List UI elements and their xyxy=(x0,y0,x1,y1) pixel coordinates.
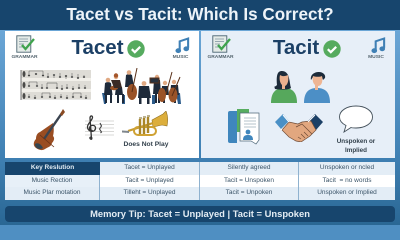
icon: speech bubble xyxy=(339,106,373,133)
row 2 xyxy=(5,175,395,187)
heading: tacit: Tacit xyxy=(273,36,319,59)
icon: music xyxy=(175,37,190,54)
row 1: Unspoken or ncled xyxy=(320,164,374,171)
icon: documents xyxy=(228,109,260,144)
icon: handshake xyxy=(275,114,323,142)
row header xyxy=(5,162,100,175)
title: Tacet vs Tacit: Which Is Correct? xyxy=(66,5,334,24)
label: music: MUSIC xyxy=(368,55,384,60)
icon: violin xyxy=(34,109,65,150)
row 1: Silently agreed xyxy=(228,164,270,171)
icon: check xyxy=(323,40,341,58)
row 2: Tacit = Unspoken xyxy=(224,177,274,184)
panel: tacet xyxy=(4,31,199,158)
comparison table xyxy=(5,162,395,200)
icon: two people xyxy=(271,71,330,103)
panel: tacit xyxy=(201,31,395,158)
label: unspoken or implied: Implied xyxy=(345,147,367,154)
label: unspoken or implied xyxy=(337,138,376,154)
label: does not play: Does Not Play xyxy=(124,141,168,148)
icon: music xyxy=(371,37,386,54)
row 3: Tacit = Unpoken xyxy=(226,189,272,196)
memory tip text: Memory Tip: Tacet = Unplayed | Tacit = Unspoken xyxy=(90,208,310,219)
row 2: Music Rection xyxy=(32,177,72,184)
title banner xyxy=(0,0,400,30)
row 2: Tacit = no words xyxy=(323,177,371,184)
icon: grammar xyxy=(212,35,231,53)
row 1 xyxy=(5,162,395,175)
row header: Key Reslution xyxy=(31,164,74,171)
label: music: MUSIC xyxy=(173,55,188,60)
icon: treble clef staff xyxy=(85,115,114,140)
icon: trumpet xyxy=(122,111,168,136)
icon: check xyxy=(127,40,145,58)
sheet music xyxy=(20,70,91,100)
icon: grammar xyxy=(16,35,35,53)
row 3: Tilleht = Unplayed xyxy=(124,189,175,196)
row 3: Music Plar motation xyxy=(23,189,81,196)
row 3: Unspoken or Implied xyxy=(317,189,377,196)
orchestra xyxy=(102,68,181,104)
label: grammar: GRAMMAR xyxy=(11,55,38,60)
memory tip banner xyxy=(5,206,395,222)
row 1: Tacet = Unplayed xyxy=(124,164,175,171)
row 2: Tacit = Unplayed xyxy=(125,177,174,184)
label: unspoken or implied: Unspoken or xyxy=(337,138,375,145)
label: grammar: GRAMMAR xyxy=(207,55,234,60)
row 3 xyxy=(5,187,395,200)
heading: tacet: Tacet xyxy=(71,36,124,59)
